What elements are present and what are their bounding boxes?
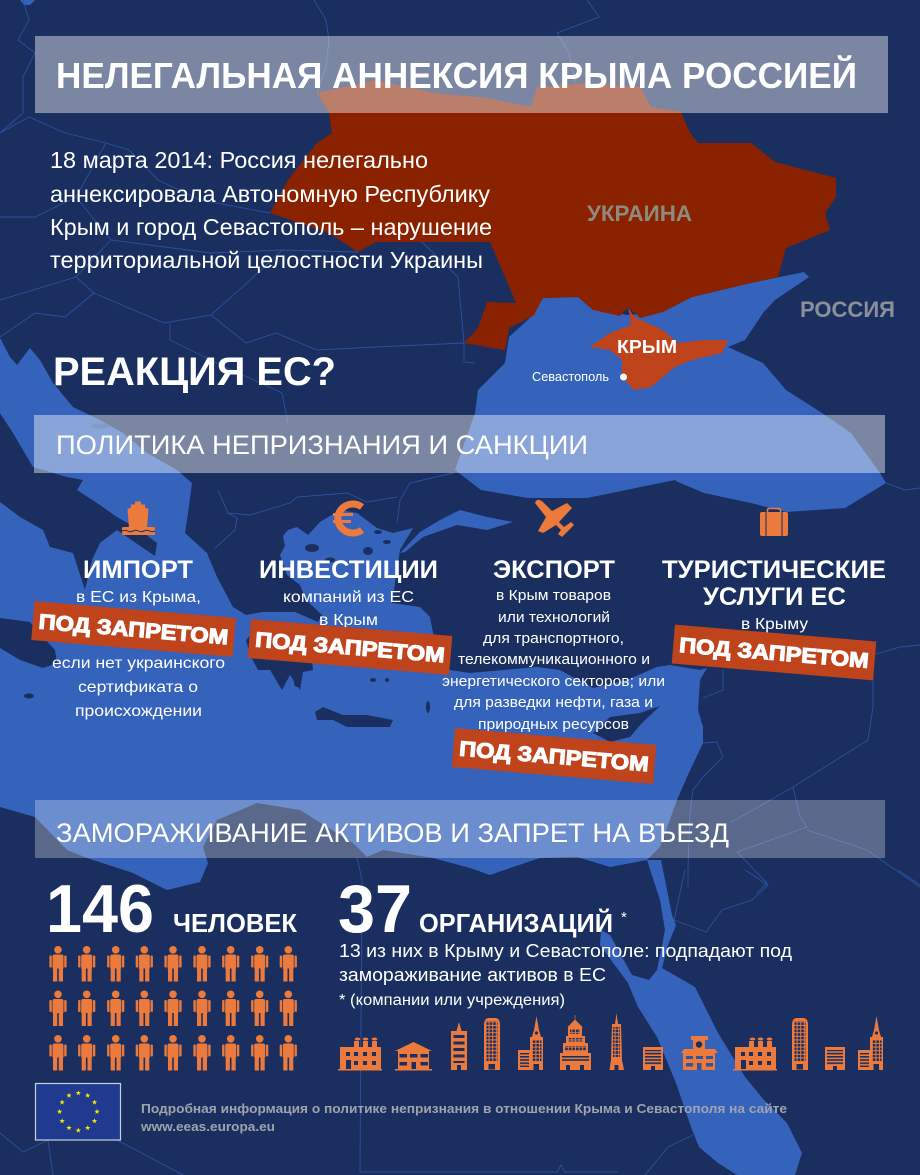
icons: buildings row	[338, 1013, 883, 1070]
intro text	[50, 147, 492, 273]
stat: 146 people	[46, 871, 297, 1070]
panel: import: в ЕС из Крыма,	[76, 589, 201, 606]
banner: asset freeze and entry ban	[35, 800, 885, 858]
icons: people grid	[49, 946, 297, 1070]
icon: euro	[333, 504, 362, 533]
banner: non-recognition policy and sanctions	[34, 415, 885, 473]
footer text: www.eeas.europa.eu	[140, 1120, 275, 1134]
intro text: аннексировала Автономную Республику	[50, 181, 490, 207]
panel: export: энергетического секторов; или	[442, 674, 665, 690]
EU flag	[36, 1084, 120, 1140]
panel: investments: ИНВЕСТИЦИИ	[259, 556, 438, 584]
icon: plane	[535, 500, 574, 537]
panel: export: в Крым товаров	[496, 588, 611, 604]
map labels: РОССИЯ	[800, 297, 895, 322]
heading: EU reaction: РЕАКЦИЯ ЕС?	[53, 350, 336, 394]
stamp: banned (investments): ПОД ЗАПРЕТОМ	[254, 629, 446, 667]
stamp: banned (export): ПОД ЗАПРЕТОМ	[458, 738, 650, 776]
map labels: КРЫМ	[617, 337, 677, 357]
panel: investments: компаний из ЕС	[283, 589, 414, 606]
intro text: территориальной целостности Украины	[50, 247, 483, 273]
stamp: banned (import)	[31, 601, 236, 657]
Sicily	[0, 618, 57, 668]
panel: tourism	[662, 508, 886, 633]
islands	[24, 424, 430, 713]
panel: import: если нет украинского	[52, 655, 225, 672]
stat: 37 organisations: ОРГАНИЗАЦИЙ	[419, 908, 613, 938]
panel: export: для транспортного,	[483, 631, 624, 647]
map labels	[532, 201, 895, 384]
map labels: Севастополь	[532, 370, 609, 384]
Italy	[0, 413, 157, 590]
map: Crimea	[590, 307, 728, 390]
Sea of Marmara	[400, 510, 513, 553]
panel: export	[442, 500, 665, 733]
panel: export: ЭКСПОРТ	[493, 556, 615, 584]
Suez and Red Sea	[600, 860, 802, 1175]
icon: house	[395, 1042, 432, 1070]
title: НЕЛЕГАЛЬНАЯ АННЕКСИЯ КРЫМА РОССИЕЙ	[56, 54, 857, 96]
stat: 37 organisations: замораживание активов в ЕС	[339, 964, 606, 985]
panel: investments	[259, 504, 438, 629]
stat: 37 organisations	[338, 871, 792, 1009]
stat: 146 people: ЧЕЛОВЕК	[173, 908, 297, 938]
stamp: banned (import): ПОД ЗАПРЕТОМ	[38, 611, 229, 649]
Crete	[315, 707, 393, 727]
Cyprus	[593, 706, 660, 742]
panel: export: или технологий	[498, 610, 610, 626]
icon: art deco building	[560, 1015, 591, 1070]
stat: 146 people: 146	[46, 871, 154, 947]
footer text: Подробная информация о политике непризнания в отношении Крыма и Севастополя на сайте	[141, 1102, 787, 1116]
icon: suitcase	[760, 508, 788, 536]
panel: investments: в Крым	[319, 612, 378, 629]
map: Ukraine	[270, 80, 836, 350]
icon: tower	[451, 1022, 467, 1070]
panel: tourism: в Крыму	[741, 616, 808, 633]
Peloponnese	[246, 622, 313, 690]
icon: pagoda tower	[610, 1013, 624, 1070]
panel: import	[52, 502, 225, 720]
banner: asset freeze and entry ban: ЗАМОРАЖИВАНИЕ АКТИВОВ И ЗАПРЕТ НА ВЪЕЗД	[56, 818, 729, 848]
stamp: banned (export)	[452, 728, 656, 784]
Mediterranean sea	[0, 338, 707, 890]
icon: ship	[122, 502, 155, 535]
footer text	[140, 1102, 787, 1134]
icon: school	[681, 1036, 718, 1070]
stat: 37 organisations: 37	[338, 871, 412, 947]
map labels: УКРАИНА	[587, 201, 692, 226]
panel: export: природных ресурсов	[478, 717, 629, 733]
panel: export: для разведки нефти, газа и	[454, 695, 653, 711]
stamp: banned (tourism)	[672, 625, 876, 680]
Black Sea and Azov	[455, 272, 886, 512]
panel: import: происхождении	[75, 703, 202, 720]
stat: 37 organisations: *	[621, 909, 627, 926]
panel: tourism: УСЛУГИ ЕС	[703, 583, 846, 611]
title banner	[35, 36, 888, 113]
panel: export: телекоммуникационного и	[458, 652, 650, 668]
panel: import: сертификата о	[78, 679, 198, 696]
intro text: Крым и город Севастополь – нарушение	[50, 214, 492, 240]
stamp: banned (tourism): ПОД ЗАПРЕТОМ	[678, 634, 870, 673]
Balkans	[185, 483, 357, 622]
banner: non-recognition policy and sanctions: ПОЛИТИКА НЕПРИЗНАНИЯ И САНКЦИИ	[56, 430, 588, 460]
panel: tourism: ТУРИСТИЧЕСКИЕ	[662, 556, 886, 584]
stat: 37 organisations: * (компании или учреждения)	[339, 992, 565, 1009]
intro text: 18 марта 2014: Россия нелегально	[50, 147, 428, 173]
stat: 37 organisations: 13 из них в Крыму и Севастополе: подпадают под	[339, 940, 792, 961]
stamp: banned (investments)	[248, 619, 452, 675]
panel: import: ИМПОРТ	[83, 556, 193, 584]
